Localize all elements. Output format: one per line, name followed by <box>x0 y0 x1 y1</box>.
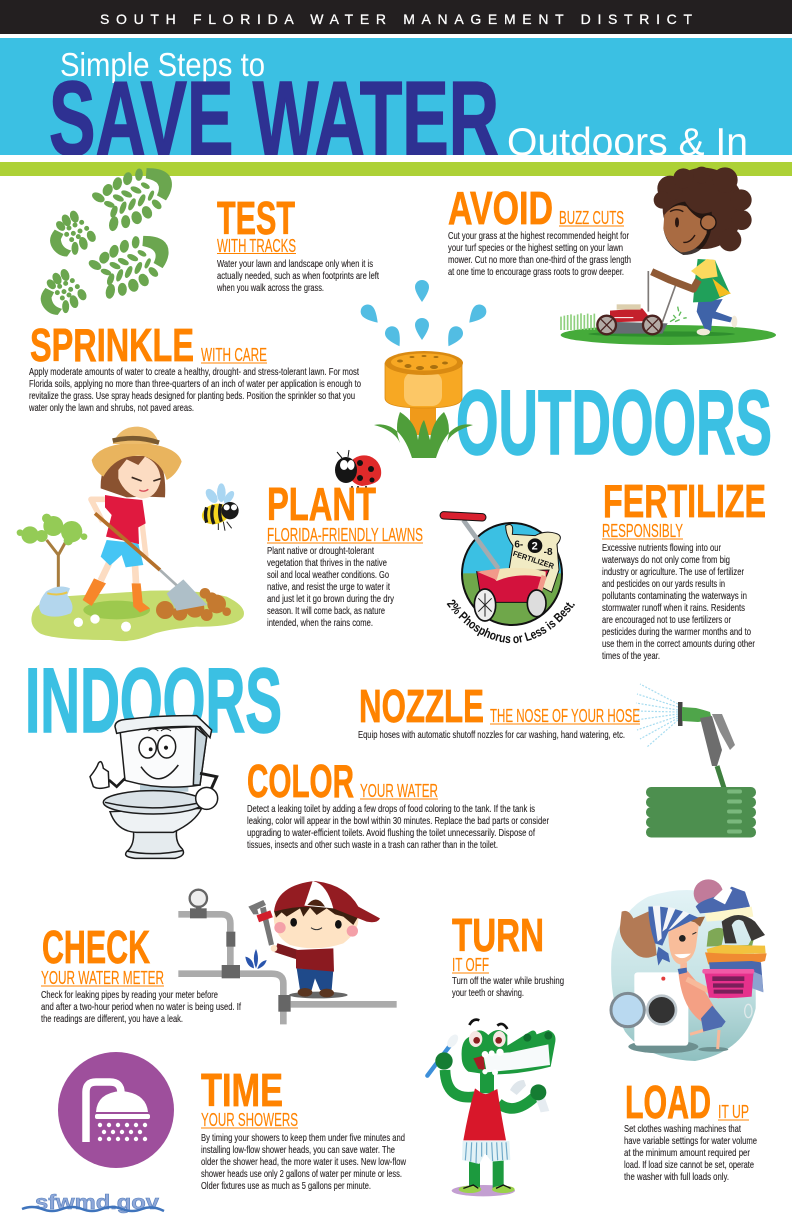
legs <box>469 1160 480 1188</box>
washing machine <box>634 972 688 1046</box>
illustration: woman doing laundry <box>611 879 767 1061</box>
wrench <box>260 907 274 946</box>
heading: sprinkle: SPRINKLE <box>30 319 194 371</box>
body: color <box>247 803 549 851</box>
subheading: with tracks: WITH TRACKS <box>217 236 296 256</box>
body: time <box>201 1132 406 1192</box>
tank neck <box>140 785 188 792</box>
skirt <box>701 1006 726 1032</box>
heading: nozzle: NOZZLE <box>359 680 484 732</box>
body: fertilize: times of the year. <box>602 650 660 662</box>
body: turn <box>452 975 564 999</box>
head <box>274 906 358 948</box>
wheels <box>597 316 616 334</box>
body: plant: season. It will come back, as nature <box>267 605 385 617</box>
jeans <box>697 299 732 331</box>
heading: test: TEST <box>217 192 295 244</box>
heading: turn: TURN <box>452 909 544 961</box>
body: test <box>216 258 379 294</box>
title: simple steps: Simple Steps to <box>60 46 265 83</box>
subheading: your water: YOUR WATER <box>360 781 438 801</box>
jacket <box>296 948 334 972</box>
text block: nozzle <box>358 680 640 741</box>
title: outdoors and in: Outdoors & In <box>507 121 748 164</box>
text block: turn it off <box>452 909 564 999</box>
heading: check: CHECK <box>42 921 150 973</box>
shadow <box>452 1185 515 1196</box>
meter gauge <box>190 890 207 907</box>
text block: sprinkle with care <box>28 319 361 414</box>
grass clippings <box>670 307 687 322</box>
shoes <box>298 988 312 997</box>
tree <box>17 514 87 617</box>
body: fertilize: Excessive nutrients flowing into our <box>602 542 721 554</box>
body: plant: vegetation that thrives in the native <box>267 557 387 569</box>
icon: boot footprints <box>42 169 171 314</box>
body: avoid: Cut your grass at the highest recommended height for <box>448 230 629 242</box>
body: avoid: mower. Cut no more than one-third of the grass length <box>448 254 631 266</box>
hair <box>274 906 358 925</box>
logo: fertilizer spreader: 6- <box>514 540 523 551</box>
body: test: actually needed, such as when footprints are left <box>217 270 379 282</box>
text block: time your showers <box>201 1064 406 1192</box>
icon: water droplets <box>358 280 489 350</box>
body: fertilize: pollutants contaminating the waterways in <box>602 590 747 602</box>
body: color: Detect a leaking toilet by adding a few drops of food coloring to the tank. If the tank is <box>247 803 535 815</box>
body: check: Check for leaking pipes by reading your meter before <box>41 989 218 1001</box>
body: plant: Plant native or drought-tolerant <box>267 545 374 557</box>
body: sprinkle: water only the lawn and shrubs, not paved areas. <box>28 402 194 414</box>
hose neck <box>717 766 724 788</box>
subheading: responsibly: RESPONSIBLY <box>602 521 683 541</box>
illustration: smiling toilet <box>90 716 218 858</box>
towel <box>535 1097 549 1112</box>
head <box>462 1030 555 1074</box>
cap <box>274 881 380 922</box>
icon: shower <box>58 1052 174 1168</box>
glasses <box>745 1004 752 1018</box>
jeans <box>297 968 333 990</box>
body: plant: native, and resist the urge to water it <box>267 581 390 593</box>
fertilizer bag <box>506 524 560 592</box>
body: turn: your teeth or shaving. <box>452 987 524 999</box>
heading: color: COLOR <box>247 755 354 807</box>
arm <box>652 272 698 289</box>
logo: sfwmd.gov: sfwmd.gov <box>35 1192 160 1214</box>
logo: fertilizer spreader <box>440 511 575 644</box>
mower base <box>605 322 668 334</box>
right hand <box>196 787 218 809</box>
nozzle <box>678 702 682 726</box>
flip flops <box>459 1186 481 1193</box>
shirt <box>105 495 146 544</box>
toilet tank <box>120 727 207 787</box>
body: test: when you walk across the grass. <box>216 282 324 294</box>
arms <box>91 499 107 522</box>
toilet base <box>126 830 184 858</box>
dress <box>678 970 715 1022</box>
body: plant: soil and local weather conditions. Go <box>267 569 389 581</box>
teeth and foam <box>483 1044 550 1072</box>
arms <box>445 1070 475 1097</box>
flowers <box>74 614 131 632</box>
legs <box>690 1030 719 1049</box>
body: load <box>624 1123 757 1183</box>
shovel <box>95 513 160 570</box>
body: plant <box>267 545 395 629</box>
title banner <box>0 38 792 178</box>
header bar: SOUTH FLORIDA WATER MANAGEMENT DISTRICT <box>100 11 692 27</box>
dirt pile <box>156 588 231 621</box>
body: test: Water your lawn and landscape only when it is <box>217 258 373 270</box>
sprinkler grass <box>374 412 473 458</box>
shirt <box>693 259 730 302</box>
illustration: boy mowing lawn <box>561 167 776 345</box>
text block: check water meter <box>41 921 241 1025</box>
illustration: girl planting with shovel <box>17 427 244 641</box>
spreader handle <box>463 520 498 568</box>
hair <box>620 910 657 958</box>
mower body <box>610 308 652 322</box>
arm <box>687 979 720 997</box>
pipes <box>178 914 230 968</box>
shorts <box>101 540 143 567</box>
body: load: the washer with full loads only. <box>624 1171 729 1183</box>
text block: fertilize <box>601 475 766 662</box>
body: sprinkle: Florida soils, applying no more than three-quarters of an inch of water per application is enough to <box>29 378 361 390</box>
text block: avoid buzz cuts <box>448 182 631 278</box>
toilet seat <box>103 791 203 814</box>
body: load: Set clothes washing machines that <box>624 1123 741 1135</box>
body: color: leaking, color will appear in the bowl within 30 minutes. Replace the bad parts or consider <box>247 815 549 827</box>
icon: sprinkler head <box>374 351 473 458</box>
shadow <box>289 992 348 998</box>
text block: test with tracks <box>216 192 379 294</box>
legs <box>101 563 109 581</box>
body: load: at the minimum amount required per <box>624 1147 750 1159</box>
spreader cart <box>477 570 549 602</box>
illustration: alligator brushing teeth <box>427 1020 555 1196</box>
body: sprinkle <box>28 366 361 414</box>
neck and collar <box>680 962 687 971</box>
arm <box>276 948 298 955</box>
tank top <box>463 1088 506 1140</box>
eyes <box>139 737 156 758</box>
subheading: the nose of your hose: THE NOSE OF YOUR HOSE <box>490 706 640 726</box>
face <box>118 457 161 499</box>
boots <box>83 578 106 606</box>
title: save water: SAVE WATER <box>49 60 499 178</box>
logo: fertilizer spreader: 2% Phosphorus or Less is Best. <box>446 600 575 644</box>
neck <box>480 1073 494 1093</box>
water leak <box>245 949 267 969</box>
illustration: garden hose and nozzle <box>635 684 756 838</box>
icon: ladybug <box>335 450 381 490</box>
icon: bee <box>200 483 239 531</box>
shovel blade <box>167 579 207 611</box>
body: time: older the shower head, the more water it uses. New low-flow <box>201 1156 406 1168</box>
body: plant: intended, when the rains come. <box>267 617 373 629</box>
mouth <box>473 1056 485 1070</box>
body: avoid <box>448 230 631 278</box>
clothes pile <box>694 879 767 992</box>
body: fertilize <box>601 542 755 662</box>
face <box>663 205 707 252</box>
header bar <box>0 0 792 34</box>
heading: load: LOAD <box>625 1076 711 1128</box>
eyes <box>469 1031 482 1047</box>
lawn <box>561 325 776 345</box>
hair <box>101 456 165 497</box>
body: avoid: your turf species or the highest setting on your lawn <box>448 242 623 254</box>
text block: load it up <box>624 1076 757 1183</box>
face <box>668 922 699 964</box>
body: check: and after a two-hour period when no water is being used. If <box>41 1001 241 1013</box>
illustration: leaking pipes and meter <box>178 890 397 1024</box>
logo: fertilizer spreader: 2 <box>532 541 538 553</box>
body: fertilize: waterways do not only come from big <box>601 554 730 566</box>
heading: time: TIME <box>201 1064 283 1116</box>
shorts <box>462 1141 510 1164</box>
body: color: upgrading to water-efficient toilets. Avoid flushing the toilet unnecessarily. Dispose of <box>247 827 535 839</box>
heading: avoid: AVOID <box>448 182 553 234</box>
heading: indoors: INDOORS <box>25 650 282 752</box>
body: sprinkle: Apply moderate amounts of water to create a healthy, drought- and stress-tolerant lawn. For most <box>29 366 359 378</box>
subheading: your showers: YOUR SHOWERS <box>201 1110 298 1130</box>
hat <box>92 443 182 480</box>
body: check <box>41 989 241 1025</box>
body: time: shower heads use only 2 gallons of water per minute or less. <box>201 1168 402 1180</box>
scarf <box>648 906 698 946</box>
subheading: with care: WITH CARE <box>201 345 267 365</box>
lawn patch <box>31 590 244 641</box>
thumbs up hand <box>90 762 109 788</box>
mower handle <box>648 271 676 322</box>
body: fertilize: are encouraged not to use fertilizers or <box>602 614 731 626</box>
water spray <box>635 684 678 747</box>
body: turn: Turn off the water while brushing <box>452 975 564 987</box>
heading: plant: PLANT <box>267 478 376 530</box>
backdrop <box>611 890 756 1061</box>
paste <box>510 1080 526 1095</box>
logo: fertilizer spreader: FERTILIZER <box>512 549 556 571</box>
logo: fertilizer spreader: -8 <box>544 547 553 558</box>
caption arc <box>446 585 588 643</box>
body: nozzle: Equip hoses with automatic shutoff nozzles for car washing, hand watering, etc. <box>358 729 625 741</box>
subheading: your water meter: YOUR WATER METER <box>41 968 164 988</box>
hair <box>654 167 752 251</box>
body: time: installing low-flow shower heads, you can save water. The <box>201 1144 395 1156</box>
body: time: By timing your showers to keep them under five minutes and <box>201 1132 405 1144</box>
body: plant: and just let it go brown during the dry <box>267 593 395 605</box>
text block: plant <box>267 478 423 629</box>
body: time: Older fixtures use as much as 5 gallons per minute. <box>201 1180 371 1192</box>
body: check: the readings are different, you have a leak. <box>41 1013 183 1025</box>
subheading: it off: IT OFF <box>452 955 489 975</box>
hose coil <box>646 787 756 838</box>
arms <box>109 778 125 787</box>
body: avoid: at one time to encourage grass roots to grow deeper. <box>448 266 624 278</box>
body: sprinkle: revitalize the grass. Use spray heads designed for planting beds. Position the sprinkler so that you <box>29 390 355 402</box>
illustration: plumber kid <box>271 881 380 998</box>
body: fertilize: and pesticides on our yards results in <box>602 578 725 590</box>
wheels <box>527 590 546 617</box>
subheading: florida-friendly lawns: FLORIDA-FRIENDLY LAWNS <box>267 525 423 545</box>
laundry basket <box>704 969 754 998</box>
body: color: tissues, insects and other such waste in a trash can rather than in the toilet. <box>247 839 498 851</box>
toothbrush <box>427 1043 452 1076</box>
subheading: it up: IT UP <box>718 1102 749 1122</box>
subheading: buzz cuts: BUZZ CUTS <box>559 208 624 228</box>
toilet bowl <box>110 808 202 832</box>
text block: color your water <box>247 755 549 851</box>
